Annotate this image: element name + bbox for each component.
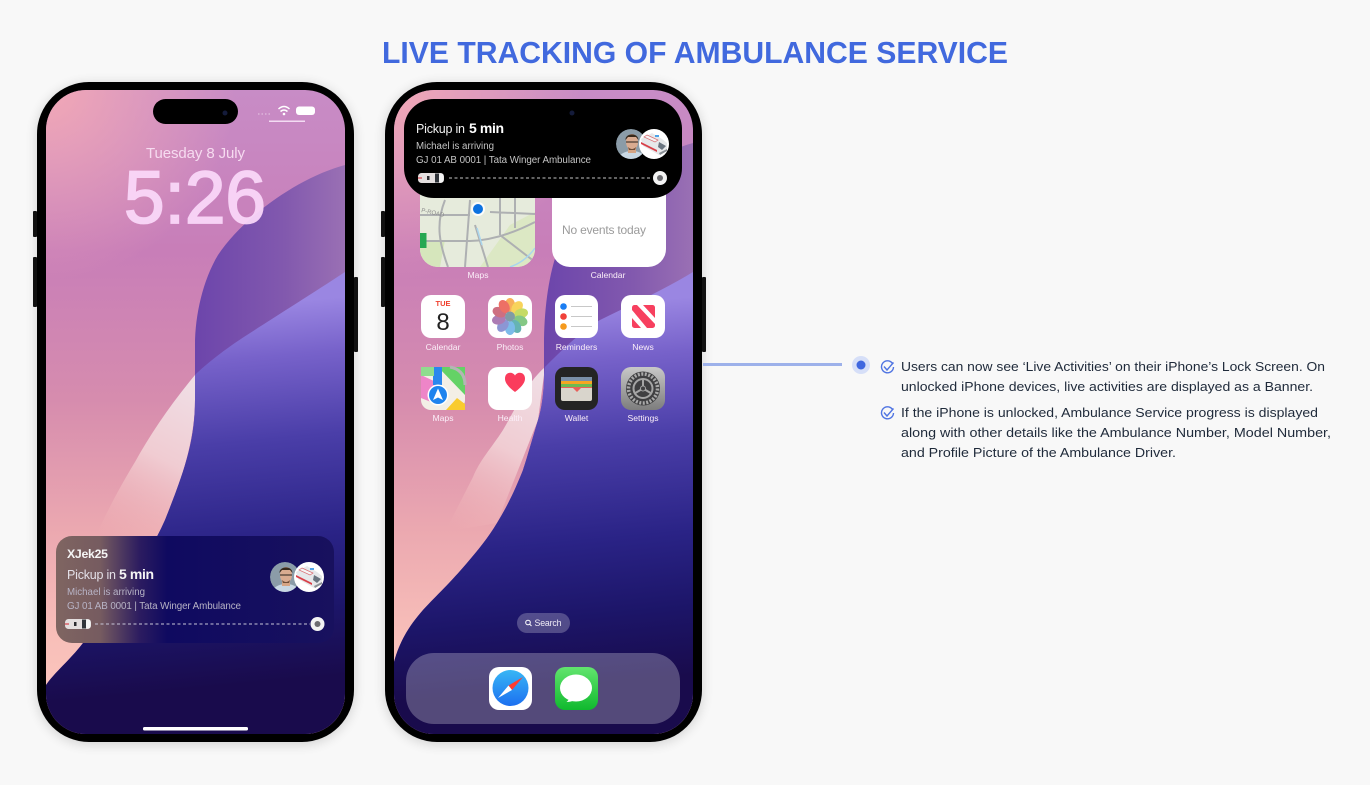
app: calendar: 8 — [436, 309, 450, 336]
app: calendar — [421, 295, 465, 352]
maps widget — [420, 194, 535, 267]
calendar widget label: Calendar — [591, 270, 626, 280]
search pill — [517, 613, 570, 633]
app: calendar: Calendar — [426, 342, 461, 352]
bullet 2 — [882, 405, 1331, 460]
app: settings: Settings — [627, 413, 659, 423]
icon: check — [882, 361, 894, 373]
maps widget: P-ROAD — [421, 208, 445, 219]
date: Tuesday 8 July — [146, 145, 246, 162]
expanded dynamic island banner: GJ 01 AB 0001 | Tata Winger Ambulance — [416, 155, 592, 166]
bullet 2: If the iPhone is unlocked, Ambulance Service progress is displayed — [901, 405, 1318, 420]
bullet 2: along with other details like the Ambulance Number, Model Number, — [901, 425, 1331, 440]
home indicator — [143, 727, 248, 730]
home screen wallpaper — [394, 90, 693, 735]
icon: check — [882, 407, 894, 419]
app: news: News — [632, 342, 654, 352]
app: news — [621, 295, 665, 352]
dynamic island — [153, 99, 238, 124]
calendar widget: No events today — [562, 223, 646, 237]
lock screen wallpaper — [46, 90, 345, 735]
dock — [406, 653, 680, 724]
app: maps: Maps — [432, 413, 454, 423]
status bar icons — [258, 106, 315, 122]
phone: lock screen — [33, 82, 358, 744]
live activity card — [56, 536, 334, 643]
expanded dynamic island banner: Michael is arriving — [416, 141, 494, 152]
app: reminders — [555, 295, 598, 352]
live activity card: GJ 01 AB 0001 | Tata Winger Ambulance — [67, 601, 242, 612]
app: wallet — [555, 367, 598, 423]
expanded dynamic island banner: 5 min — [469, 120, 504, 136]
app: calendar: TUE — [436, 299, 450, 308]
live activity card: Michael is arriving — [67, 587, 145, 598]
phone: home screen — [381, 82, 706, 744]
search pill: Search — [534, 618, 562, 628]
live activity card: Pickup in — [67, 568, 116, 582]
bullet 1 — [882, 359, 1325, 394]
bullet list — [882, 359, 1331, 460]
app: messages — [555, 667, 598, 710]
connector dot — [852, 356, 870, 374]
expanded dynamic island banner: Pickup in — [416, 122, 465, 136]
app: photos — [488, 295, 532, 352]
progress track — [418, 171, 667, 185]
connector line — [703, 363, 842, 366]
driver and ambulance avatars — [270, 562, 324, 602]
bullet 2: and Profile Picture of the Ambulance Driver. — [901, 445, 1176, 460]
bullet 1: unlocked iPhone devices, live activities are displayed as a Banner. — [901, 379, 1313, 394]
app: health: Health — [498, 413, 523, 423]
driver and ambulance avatars — [616, 129, 669, 169]
expanded dynamic island banner — [404, 99, 682, 198]
calendar widget — [552, 170, 666, 267]
app: photos: Photos — [497, 342, 523, 352]
time: 5:26 — [124, 156, 266, 239]
app: safari — [489, 667, 532, 710]
live activity card: 5 min — [119, 566, 154, 582]
title: LIVE TRACKING OF AMBULANCE SERVICE — [382, 35, 1008, 70]
maps widget label: Maps — [467, 270, 489, 280]
app: health — [488, 367, 532, 423]
app: settings — [621, 367, 665, 423]
app grid — [421, 295, 665, 423]
app: maps — [421, 367, 465, 423]
app: reminders: Reminders — [556, 342, 597, 352]
progress track — [65, 617, 324, 631]
app: wallet: Wallet — [565, 413, 589, 423]
bullet 1: Users can now see ‘Live Activities’ on their iPhone’s Lock Screen. On — [901, 359, 1325, 374]
live activity card: XJek25 — [67, 547, 108, 561]
